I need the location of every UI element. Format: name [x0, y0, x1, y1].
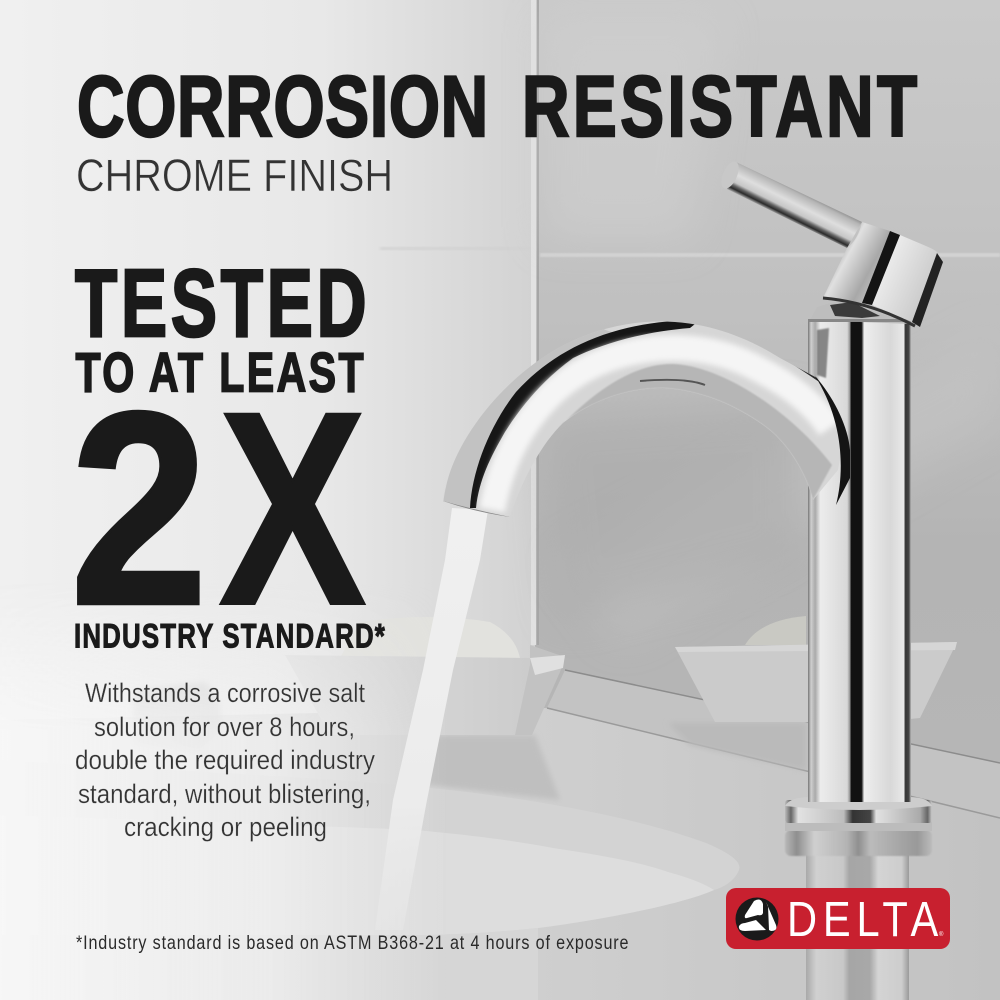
logo: Delta: DELTA: [787, 892, 939, 947]
logo: Delta: ®: [939, 931, 944, 938]
subtitle: CHROME FINISH: [76, 150, 393, 201]
industry standard: INDUSTRY STANDARD*: [74, 618, 385, 655]
body text: double the required industry: [75, 745, 375, 775]
front counter: [0, 928, 538, 1000]
dish reflections on counter: [668, 723, 806, 770]
left wall wash: [0, 0, 535, 720]
body text: standard, without blistering,: [78, 779, 371, 809]
body text: cracking or peeling: [124, 812, 327, 842]
sink rim: [0, 760, 739, 1000]
water stream: [375, 508, 488, 930]
handle cap: [823, 222, 943, 327]
footnote: *Industry standard is based on ASTM B368-21 at 4 hours of exposure: [76, 932, 629, 953]
title: RESISTANT: [522, 59, 917, 155]
body text: Withstands a corrosive salt: [85, 678, 365, 708]
faint blur behind text: [133, 682, 221, 750]
big number 2X: [70, 356, 367, 662]
faucet reflection: [785, 822, 932, 1000]
soap dish left: [285, 617, 565, 735]
white fade overlay: [0, 680, 385, 1000]
faucet: [388, 162, 943, 868]
big number 2X: 2: [70, 356, 208, 662]
soap dish right: [675, 616, 957, 722]
title: [77, 59, 917, 155]
big number 2X: X: [219, 356, 367, 662]
counter top: [0, 708, 1000, 1000]
title: CORROSION: [77, 59, 488, 155]
right wall tile: [535, 0, 1000, 780]
body column: [808, 320, 911, 802]
body text: [75, 678, 375, 842]
sink basin: [0, 815, 714, 935]
column top reflection: [817, 328, 829, 378]
mirror edge band: [547, 670, 1000, 818]
base ring: [785, 780, 932, 823]
collar: [810, 300, 912, 324]
column dark junction curve: [815, 376, 850, 505]
spout: [443, 322, 839, 517]
logo: Delta: [726, 888, 950, 949]
lever handle: [718, 159, 862, 248]
soft wall streaks: [560, 330, 1000, 640]
headline: to at least: TO AT LEAST: [76, 342, 364, 404]
headline: tested: TESTED: [75, 249, 367, 357]
body text: solution for over 8 hours,: [94, 712, 355, 742]
